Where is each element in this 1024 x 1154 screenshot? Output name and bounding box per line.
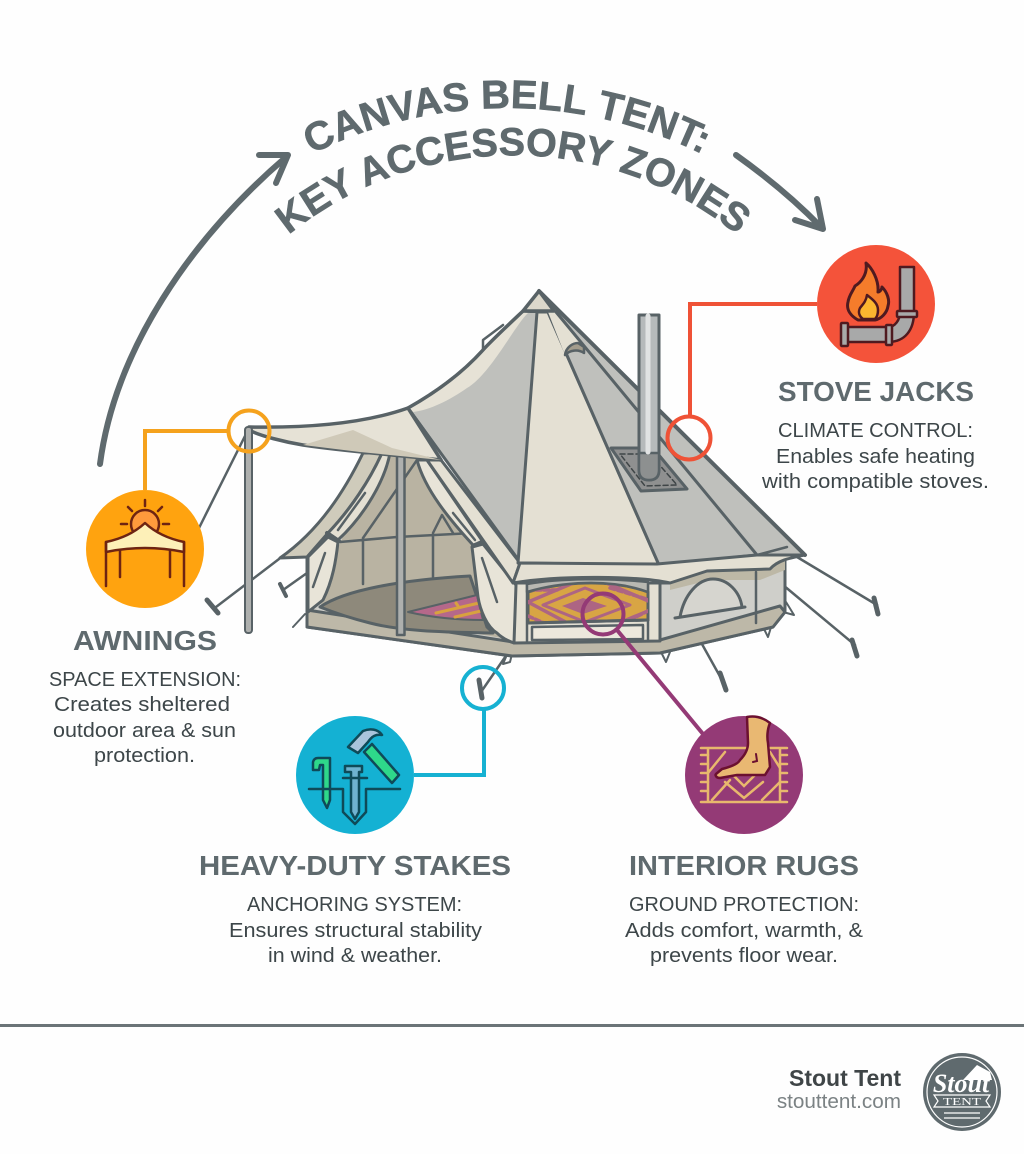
text block: awnings: SPACE EXTENSION: <box>49 669 241 691</box>
roof left grey panel <box>408 311 538 563</box>
interior rug <box>408 595 483 620</box>
callout ring and connector: stove jacks <box>668 304 817 460</box>
logo: Stout Tent badge: Stout <box>933 1069 990 1098</box>
guy lines and stakes <box>198 432 878 698</box>
callout ring and connector: rugs <box>582 594 703 734</box>
icon: stakes and hammer <box>296 716 414 834</box>
eave band <box>513 555 805 583</box>
left curtain upper <box>328 453 390 540</box>
text block: interior rugs: GROUND PROTECTION: <box>629 894 859 916</box>
roof right grey panel <box>539 291 805 565</box>
tent walls <box>307 557 785 656</box>
text block: awnings: protection. <box>94 745 195 767</box>
text block: stove jacks <box>761 376 989 493</box>
roof centre cream panel <box>518 312 659 565</box>
text block: heavy-duty stakes: HEAVY-DUTY STAKES <box>199 850 511 881</box>
arrow: right curved arrow <box>736 155 823 229</box>
text block: stove jacks: CLIMATE CONTROL: <box>778 420 973 442</box>
tent illustration <box>198 291 878 698</box>
roof back flap <box>483 325 503 350</box>
stove patch <box>611 448 687 491</box>
text block: stove jacks: Enables safe heating <box>776 446 975 468</box>
callout ring and connector: awnings <box>145 410 270 490</box>
roof strip right of door <box>427 460 520 583</box>
footer brand text: stouttent.com <box>777 1090 901 1113</box>
right curtain upper <box>417 460 483 545</box>
callout ring and connector: stakes <box>414 667 504 775</box>
text block: interior rugs: Adds comfort, warmth, & <box>625 920 864 942</box>
footer brand text: Stout Tent <box>789 1065 901 1091</box>
text block: interior rugs: prevents floor wear. <box>650 945 838 967</box>
text block: heavy-duty stakes <box>199 850 511 967</box>
interior back wall <box>320 453 514 640</box>
text block: awnings: AWNINGS <box>73 625 217 656</box>
icon: rug and foot <box>685 716 803 834</box>
icon: awning <box>86 490 204 608</box>
text block: heavy-duty stakes: in wind & weather. <box>268 945 442 967</box>
text block: awnings: outdoor area & sun <box>53 720 236 742</box>
awning canopy <box>249 408 441 460</box>
roof vent <box>565 343 584 355</box>
text block: awnings <box>49 625 241 767</box>
title: curved heading: CANVAS BELL TENT: <box>305 80 708 153</box>
front window with rug <box>528 583 648 623</box>
icon: stove jack <box>817 245 935 363</box>
text block: heavy-duty stakes: Ensures structural stability <box>229 920 482 942</box>
logo: Stout Tent badge <box>923 1053 1001 1131</box>
interior floor <box>320 576 493 633</box>
arched wall window <box>680 579 742 617</box>
arrow: left curved arrow <box>100 155 288 464</box>
text block: stove jacks: STOVE JACKS <box>778 376 974 407</box>
footer brand text <box>777 1065 901 1113</box>
title: curved heading: KEY ACCESSORY ZONES <box>274 128 750 234</box>
awning pole <box>245 427 252 633</box>
door pole <box>397 452 404 635</box>
stove pipe <box>639 315 659 480</box>
text block: interior rugs: INTERIOR RUGS <box>629 850 859 881</box>
roof cap <box>523 291 554 311</box>
left eave flap <box>280 453 382 558</box>
footer divider <box>0 1024 1024 1027</box>
logo: Stout Tent badge: TENT <box>943 1097 981 1108</box>
text block: interior rugs <box>625 850 864 967</box>
right curtain lower <box>472 544 516 643</box>
window sill <box>532 625 643 640</box>
text block: heavy-duty stakes: ANCHORING SYSTEM: <box>247 894 462 916</box>
text block: awnings: Creates sheltered <box>54 694 230 716</box>
left curtain lower <box>308 537 338 612</box>
text block: stove jacks: with compatible stoves. <box>761 471 989 493</box>
title: curved heading <box>274 80 750 234</box>
